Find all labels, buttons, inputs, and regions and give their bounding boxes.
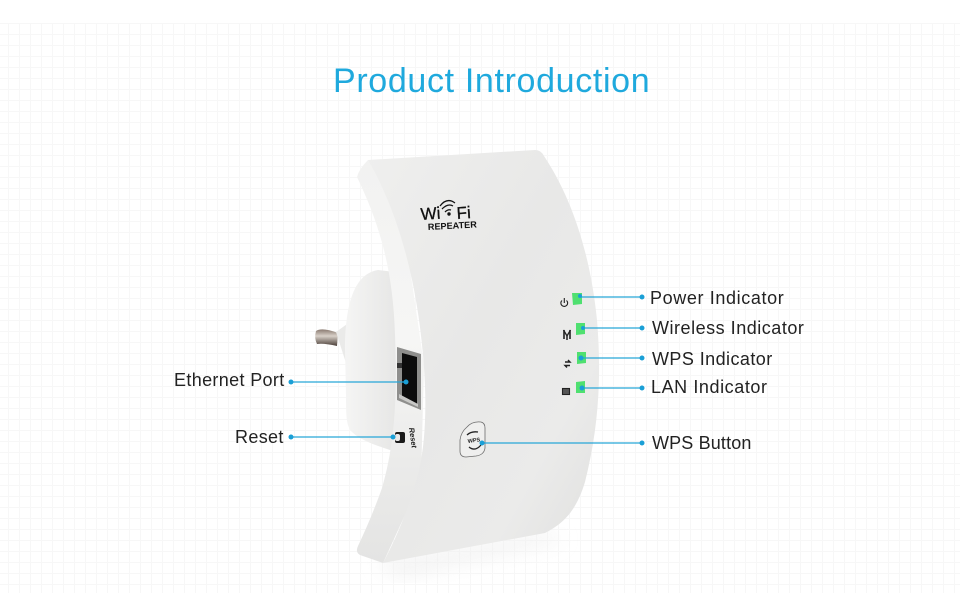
label: wireless indicator: Wireless Indicator — [652, 318, 804, 338]
plug pin — [315, 329, 338, 346]
indicator leds — [572, 293, 586, 393]
label: ethernet port: Ethernet Port — [174, 370, 285, 390]
callout: wireless indicator — [581, 326, 644, 330]
device shadow — [375, 532, 565, 578]
wps button: WPS — [467, 437, 481, 445]
reset button — [395, 432, 405, 443]
device side bevel — [357, 160, 424, 563]
icon: wifi repeater device — [315, 150, 599, 563]
device front face — [368, 150, 599, 563]
logo: wifi repeater: Wi — [420, 204, 441, 224]
label: wps button: WPS Button — [652, 433, 752, 453]
indicator icons — [561, 298, 570, 394]
label: wps indicator: WPS Indicator — [652, 349, 773, 369]
callout lines — [288, 294, 644, 446]
logo: wifi repeater: Fi — [456, 203, 471, 223]
plug body — [345, 270, 405, 452]
callout: power indicator — [578, 294, 644, 300]
callout: lan indicator — [580, 386, 644, 390]
label: reset: Reset — [235, 427, 284, 447]
callout: wps indicator — [578, 356, 644, 360]
callout: ethernet port — [288, 380, 408, 384]
plug cone — [336, 322, 350, 366]
label: lan indicator: LAN Indicator — [651, 377, 768, 397]
logo: wifi repeater: REPEATER — [428, 219, 478, 232]
logo: wifi repeater — [420, 201, 478, 232]
callout: reset — [288, 434, 396, 440]
label: power indicator: Power Indicator — [650, 288, 784, 308]
callout: wps button — [480, 440, 644, 446]
wps button — [460, 422, 485, 457]
reset label: Reset — [407, 427, 419, 449]
ethernet port — [397, 347, 421, 410]
title: Product Introduction — [333, 62, 650, 100]
